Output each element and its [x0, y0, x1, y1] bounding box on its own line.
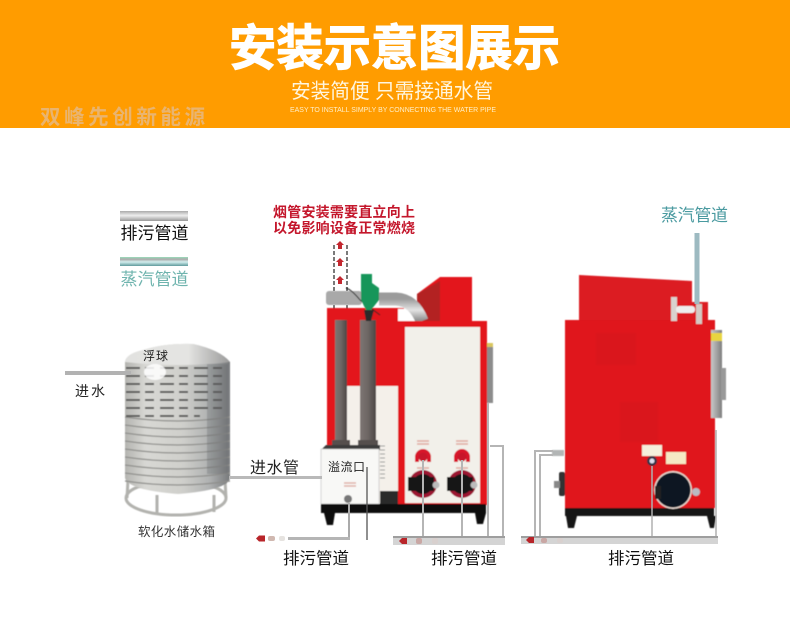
boiler rear view [552, 206, 728, 528]
drain pipe group: overflow [256, 467, 367, 568]
flue instruction callout: 烟管安装需要直立向上 [273, 204, 415, 220]
steam label: 蒸汽管道 [661, 206, 728, 225]
flue pipes [335, 320, 347, 446]
main body [565, 320, 715, 508]
green blower [361, 274, 379, 310]
legend: steam pipe: 蒸汽管道 [120, 270, 188, 289]
left fitting [552, 450, 564, 456]
burners [409, 470, 437, 498]
drain valve [344, 495, 352, 503]
flue instruction callout [273, 204, 415, 236]
flue instruction callout: 以免影响设备正常燃烧 [273, 220, 415, 236]
title: 安装示意图展示 [229, 22, 560, 76]
burner [654, 471, 692, 509]
water tank [65, 344, 230, 539]
left knob [559, 472, 565, 496]
small plates [417, 441, 468, 468]
inlet pipe to boiler: 进水管 [250, 459, 299, 477]
upper box [579, 275, 692, 320]
steam pipe [694, 233, 700, 304]
drain pipe group: rear [521, 430, 718, 568]
inlet pipe [65, 371, 131, 375]
top chimney box [417, 277, 472, 321]
overflow box [321, 445, 380, 450]
subtitle: 安装简便 只需接通水管 [291, 80, 493, 103]
inlet label: 进水 [75, 383, 105, 399]
base and feet [321, 504, 486, 513]
tank body [125, 344, 230, 494]
drain pipe group: overflow: 排污管道 [283, 549, 349, 568]
valves [415, 449, 431, 462]
legend: drain pipe [120, 211, 188, 243]
steam valve [671, 297, 677, 321]
drain pipe group: rear: 排污管道 [608, 549, 674, 568]
tank stand [126, 480, 226, 515]
flow arrows [526, 537, 534, 543]
watermark: 双峰先创新能源 [40, 105, 206, 129]
flow arrows [399, 538, 407, 544]
base and feet [565, 508, 714, 516]
plates [642, 445, 662, 456]
door frame [400, 321, 487, 505]
overflow label: 溢流口 [328, 460, 365, 474]
header banner [0, 0, 790, 128]
float label: 浮球 [143, 349, 168, 363]
inlet pipe to boiler [229, 459, 322, 479]
boiler front view [321, 274, 493, 525]
drain pipe group: front burners [393, 403, 505, 568]
boiler left body [327, 308, 404, 386]
flue direction arrows [334, 241, 347, 318]
drain pipe group: front burners: 排污管道 [431, 549, 497, 568]
legend: steam pipe [120, 257, 188, 289]
level gauge [711, 330, 722, 418]
tank caption: 软化水储水箱 [138, 524, 215, 539]
flue collar [326, 291, 362, 305]
legend: drain pipe: 排污管道 [120, 224, 188, 243]
english subtitle: EASY TO INSTALL SIMPLY BY CONNECTING THE WATER PIPE [290, 107, 496, 114]
side gauge [487, 345, 493, 403]
flow arrows [256, 536, 265, 542]
small valve [647, 456, 657, 466]
blower elbow [398, 309, 416, 321]
